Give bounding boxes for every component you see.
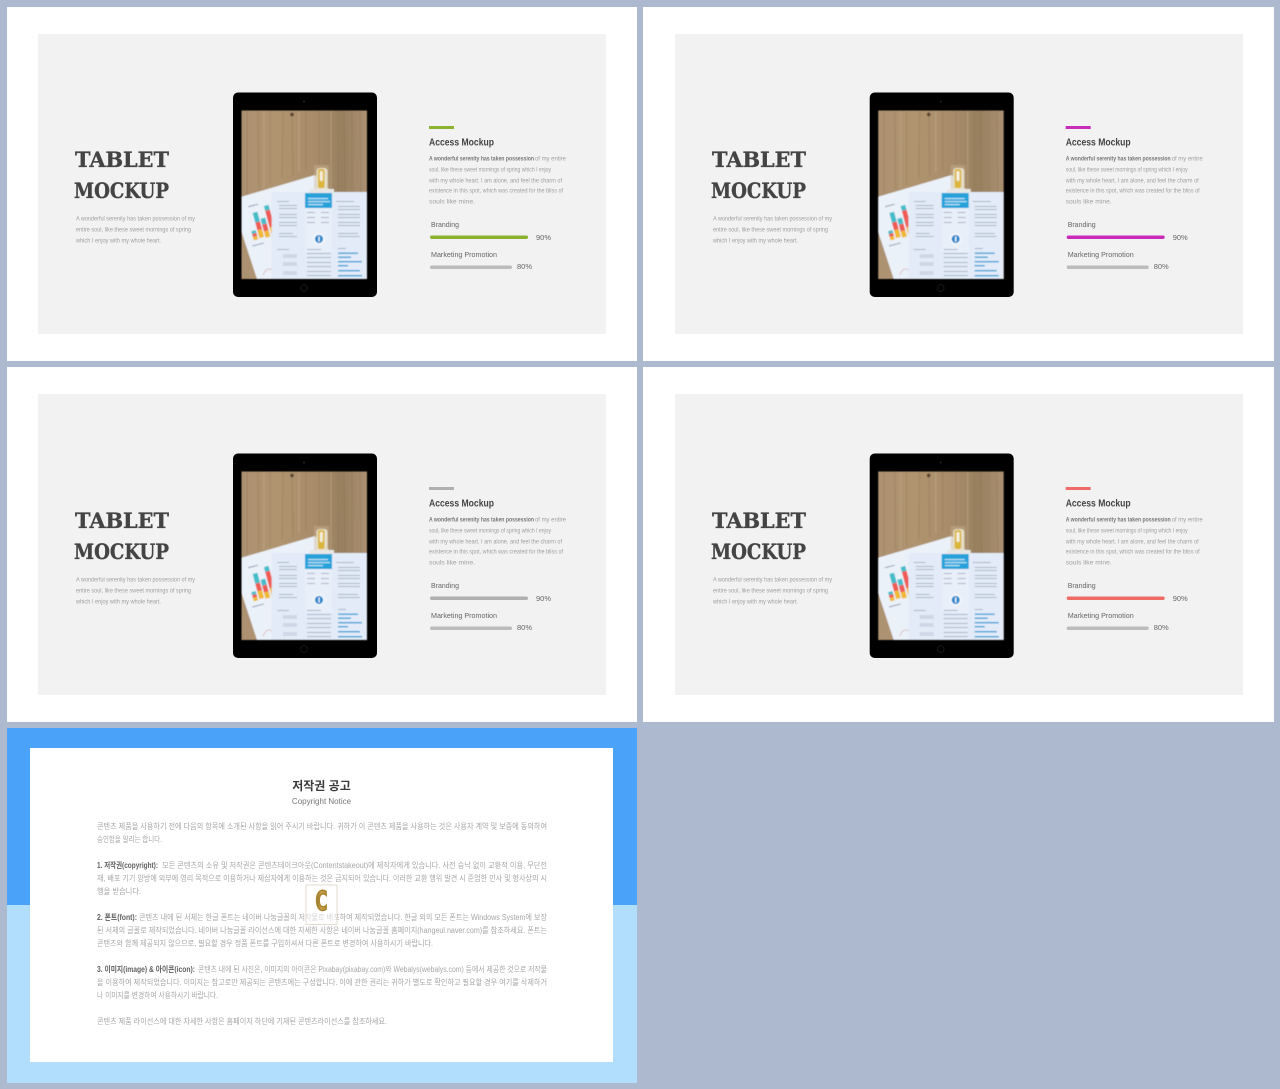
description	[75, 216, 195, 244]
paragraph: with my whole heart. I am alone, and feel the charm of	[1065, 540, 1199, 546]
section 2: font: 2. 폰트(font):	[97, 913, 137, 922]
slide 5: copyright notice	[7, 728, 637, 1083]
skill: branding: Branding	[431, 581, 459, 590]
heading: Access Mockup	[1066, 498, 1131, 510]
section 3: image and icon: 3. 이미지(image) & 아이콘(icon):	[97, 964, 195, 974]
description: entire soul, like these sweet mornings of spring	[713, 588, 828, 594]
paragraph: of my entire	[535, 518, 567, 524]
paragraph: soul, like these sweet mornings of spring which I enjoy	[429, 168, 551, 174]
slide 1: green tablet mockup	[7, 7, 637, 361]
skill: branding: 90%	[1173, 594, 1188, 603]
section 1: copyright	[97, 860, 547, 896]
description: A wonderful serenity has taken possession of my	[76, 578, 195, 584]
slide 2: magenta tablet mockup	[643, 7, 1274, 361]
slide 3: grey tablet mockup	[7, 367, 637, 722]
paragraph	[428, 157, 567, 206]
paragraph: souls like mine.	[429, 200, 475, 206]
skill: branding	[1067, 220, 1188, 242]
skill: branding: Branding	[1068, 581, 1096, 590]
title: MOCKUP	[711, 178, 806, 203]
skill: branding	[430, 581, 551, 603]
notice heading: 저작권 공고	[292, 778, 351, 793]
title: TABLET	[75, 147, 169, 172]
watermark logo	[306, 885, 337, 924]
tablet image	[233, 92, 377, 297]
skill: marketing promotion	[1067, 611, 1169, 632]
skill: branding: Branding	[1068, 220, 1096, 229]
paragraph: with my whole heart. I am alone, and feel the charm of	[428, 540, 562, 546]
intro text: 콘텐츠 제품을 사용하기 전에 다음의 항목에 소개된 사항을 읽어 주시기 바랍니다. 귀하가 이 콘텐츠 제품을 사용하는 것은 사용자 계약 및 보증에 동의하여	[97, 821, 547, 831]
title: TABLET	[712, 508, 806, 533]
tablet image	[870, 454, 1014, 658]
skill: branding	[1067, 581, 1188, 603]
paragraph: A wonderful serenity has taken possession	[429, 157, 534, 163]
description: entire soul, like these sweet mornings of spring	[76, 588, 191, 594]
skill: marketing promotion: Marketing Promotion	[1068, 611, 1134, 620]
paragraph: A wonderful serenity has taken possession	[429, 518, 534, 524]
intro text	[97, 821, 547, 844]
skill: marketing promotion: 80%	[1154, 262, 1169, 271]
skill: branding: 90%	[536, 233, 551, 242]
paragraph: A wonderful serenity has taken possession	[1066, 157, 1171, 163]
description: which I enjoy with my whole heart.	[712, 238, 798, 244]
skill: branding: Branding	[431, 220, 459, 229]
description: entire soul, like these sweet mornings of spring	[76, 228, 191, 234]
description	[712, 216, 832, 244]
heading: Access Mockup	[1066, 138, 1131, 148]
section 3: image and icon: 나 이미지를 변경하여 사용하시기 바랍니다.	[97, 990, 218, 1000]
paragraph: existence in this spot, which was created for the bliss of	[1066, 189, 1200, 195]
skill: marketing promotion: Marketing Promotion	[431, 250, 497, 259]
paragraph: of my entire	[1172, 518, 1203, 524]
watermark logo: C	[316, 886, 328, 917]
skill: branding: 90%	[536, 594, 551, 603]
section 3: image and icon	[97, 964, 547, 1000]
description: which I enjoy with my whole heart.	[75, 600, 161, 606]
paragraph: souls like mine.	[1066, 200, 1112, 206]
section 3: image and icon: 을 이용하여 제작되었습니다. 이미지는 참고로만 제공되는 콘텐츠에는 구성합니다. 이에 관한 권리는 귀하가 별도로 확인하고 필요할 경우 여기를 삭제하거	[97, 977, 547, 987]
section 1: copyright: 재, 배포 기기 양방에 외부에 영리 목적으로 이용하거나 제삼자에게 이용하는 것은 금지되어 있습니다. 이러한 교환 행위 발견 시 준엄한 민사 및 형사상의 시	[97, 873, 547, 883]
section 2: font: 콘텐츠 내에 된 서체는 한글 폰트는 네이버 나눔글꼴의 저작물로 배포하여 제작되었습니다. 한글 외의 모든 폰트는 Windows System에 보장	[139, 912, 548, 922]
skill: marketing promotion: Marketing Promotion	[431, 611, 497, 620]
section 2: font: 된 서체의 글꼴로 제작되었습니다. 네이버 나눔글꼴 라이선스에 대한 자세한 사항은 네이버 나눔글꼴 홈페이지(hangeul.naver.com)를 참조하세요. 폰트는	[97, 925, 547, 935]
paragraph	[428, 518, 567, 567]
paragraph: with my whole heart. I am alone, and feel the charm of	[1065, 179, 1199, 185]
title: TABLET	[712, 147, 806, 172]
description: A wonderful serenity has taken possession of my	[713, 578, 832, 584]
notice heading: Copyright Notice	[292, 797, 352, 806]
title: MOCKUP	[74, 539, 169, 564]
tablet image	[870, 92, 1014, 297]
description	[75, 578, 195, 606]
description: which I enjoy with my whole heart.	[75, 238, 161, 244]
section 2: font	[97, 912, 548, 948]
skill: branding	[430, 220, 551, 242]
title	[74, 508, 169, 564]
description	[712, 578, 832, 606]
heading: Access Mockup	[429, 498, 494, 510]
skill: marketing promotion	[430, 611, 532, 632]
title	[74, 147, 169, 203]
closing note: 콘텐츠 제품 라이선스에 대한 자세한 사항은 홈페이지 하단에 기재된 콘텐츠라이선스를 참조하세요.	[97, 1016, 387, 1026]
title: TABLET	[75, 508, 169, 533]
title: MOCKUP	[711, 539, 806, 564]
paragraph: A wonderful serenity has taken possession	[1066, 518, 1171, 524]
title	[711, 508, 806, 564]
description: A wonderful serenity has taken possession of my	[76, 216, 195, 222]
section 1: copyright: 행을 받습니다.	[97, 886, 141, 896]
skill: marketing promotion: 80%	[1154, 623, 1169, 632]
section 2: font: 콘텐츠와 함께 제공되지 않으므로, 필요할 경우 정품 폰트를 구입하셔서 다른 폰트로 변경하여 사용하시기 바랍니다.	[97, 938, 433, 948]
paragraph: existence in this spot, which was created for the bliss of	[429, 550, 563, 556]
skill: marketing promotion	[1067, 250, 1169, 271]
paragraph	[1065, 157, 1203, 206]
accent bar	[429, 487, 454, 490]
section 1: copyright: 1. 저작권(copyright):	[97, 860, 158, 870]
section 1: copyright: 모든 콘텐츠의 소유 및 저작권은 콘텐츠테이크아웃(Contentstakeout)에 제작자에게 있습니다. 사전 승낙 없이 교환적 이용, 무단전	[162, 860, 547, 870]
paragraph: existence in this spot, which was created for the bliss of	[429, 189, 563, 195]
paragraph	[1065, 518, 1203, 567]
paragraph: soul, like these sweet mornings of spring which I enjoy	[429, 529, 551, 535]
description: entire soul, like these sweet mornings of spring	[713, 228, 828, 234]
skill: marketing promotion: 80%	[517, 262, 532, 271]
intro text: 승인함을 알리는 합니다.	[97, 834, 162, 844]
paragraph: souls like mine.	[429, 561, 475, 567]
paragraph: of my entire	[1172, 157, 1203, 163]
notice heading	[292, 778, 352, 806]
title: MOCKUP	[74, 178, 169, 203]
skill: marketing promotion	[430, 250, 532, 271]
description: which I enjoy with my whole heart.	[712, 600, 798, 606]
accent bar	[429, 126, 454, 129]
description: A wonderful serenity has taken possession of my	[713, 216, 832, 222]
title	[711, 147, 806, 203]
heading: Access Mockup	[429, 138, 494, 148]
paragraph: of my entire	[535, 157, 567, 163]
accent bar	[1066, 487, 1091, 490]
skill: marketing promotion: 80%	[517, 623, 532, 632]
skill: marketing promotion: Marketing Promotion	[1068, 250, 1134, 259]
tablet image	[233, 454, 377, 658]
skill: branding: 90%	[1173, 233, 1188, 242]
paragraph: soul, like these sweet mornings of spring which I enjoy	[1066, 168, 1188, 174]
section 3: image and icon: 콘텐츠 내에 된 사진은, 이미지의 아이콘은 Pixabay(pixabay.com)와 Webalys(webalys.com) 등에서 제공한 것으로 저작물	[198, 964, 547, 974]
paragraph: soul, like these sweet mornings of spring which I enjoy	[1066, 529, 1188, 535]
paragraph: existence in this spot, which was created for the bliss of	[1066, 550, 1200, 556]
paragraph: with my whole heart. I am alone, and feel the charm of	[428, 179, 562, 185]
paragraph: souls like mine.	[1066, 561, 1112, 567]
slide 4: coral tablet mockup	[643, 367, 1274, 722]
accent bar	[1066, 126, 1091, 129]
